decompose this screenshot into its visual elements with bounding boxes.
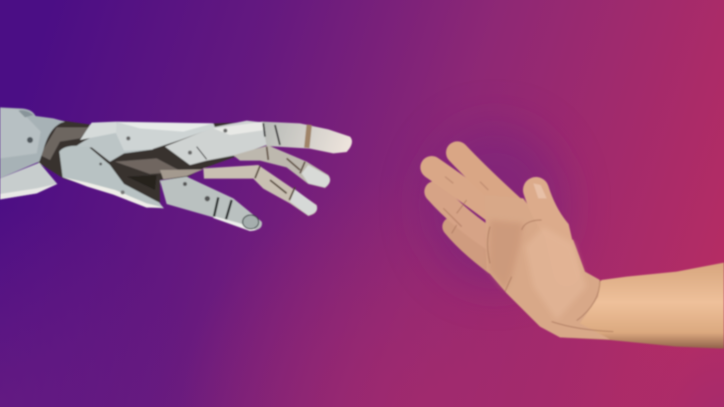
- upper forearm cuff: [0, 107, 65, 178]
- middle finger: [432, 167, 500, 217]
- palm: [485, 195, 610, 339]
- lower forearm cuff: [0, 163, 57, 199]
- robot arm and hand: [0, 107, 352, 231]
- index finger: [457, 153, 517, 210]
- thumb: [160, 177, 262, 231]
- ring finger: [203, 165, 317, 216]
- palm plate: [165, 121, 267, 165]
- robot dark base structure: [37, 118, 267, 203]
- index finger: [262, 122, 352, 153]
- middle finger: [233, 145, 330, 188]
- top hand plate: [116, 122, 215, 151]
- little finger: [452, 227, 493, 265]
- forearm lower plate: [59, 146, 164, 208]
- palm shading: [488, 220, 523, 290]
- forearm mid plate: [73, 132, 153, 162]
- thumb: [536, 190, 567, 273]
- human hand and forearm: [432, 153, 724, 349]
- hand creases: [443, 200, 613, 332]
- robot wrist joint detail: [40, 127, 90, 160]
- forearm: [557, 263, 724, 349]
- ring finger: [435, 192, 497, 243]
- exposed mechanism: [115, 158, 182, 174]
